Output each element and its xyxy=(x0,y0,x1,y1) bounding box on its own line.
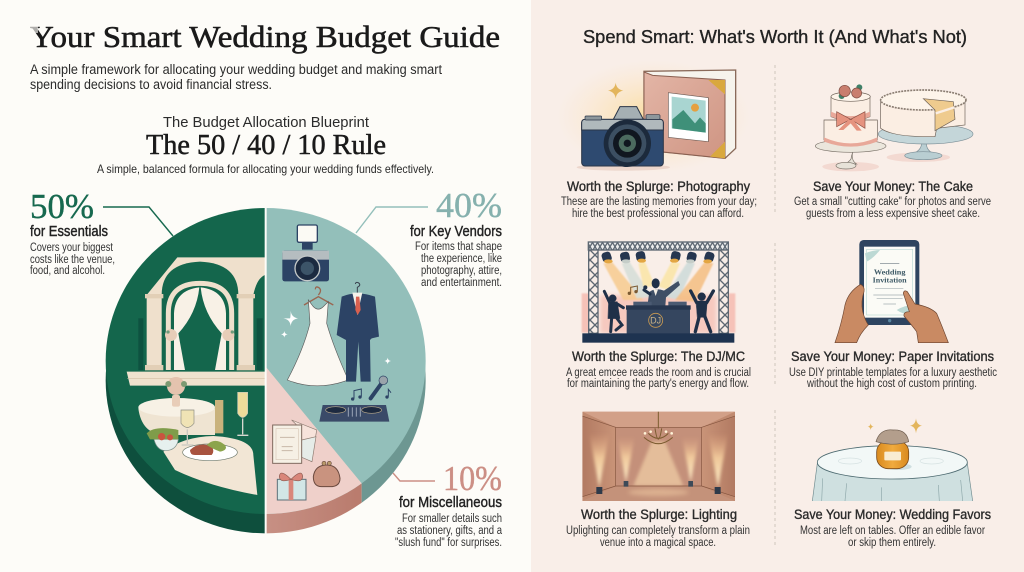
section heading: The 50 / 40 / 10 Rule xyxy=(146,130,386,161)
title: Your Smart Wedding Budget Guide xyxy=(30,19,500,54)
icon: stationery xyxy=(273,420,317,463)
card: cake xyxy=(794,84,991,220)
callout: 50% essentials: costs like the venue, xyxy=(30,254,115,266)
icon: tablet with digital invitation xyxy=(835,240,948,343)
card text xyxy=(561,196,757,220)
callout: 10% miscellaneous: for Miscellaneous xyxy=(399,495,502,511)
icon: microphone and music notes xyxy=(351,376,391,401)
card text xyxy=(566,367,751,390)
callout: 40% key vendors: the experience, like xyxy=(421,253,502,265)
panel: left background xyxy=(0,0,531,572)
callout: 50% essentials: food, and alcohol. xyxy=(30,265,105,277)
intro text: spending decisions to avoid financial stress. xyxy=(30,77,272,92)
card text xyxy=(794,196,991,220)
callout: 50% essentials: Covers your biggest xyxy=(30,242,114,254)
heading: spend smart: Spend Smart: What's Worth It (And What's Not) xyxy=(583,27,967,47)
callout: 40% key vendors xyxy=(356,186,502,289)
section description: A simple, balanced formula for allocating your wedding funds effectively. xyxy=(97,162,434,176)
section subtitle: The Budget Allocation Blueprint xyxy=(163,114,370,131)
venue arches xyxy=(127,257,265,386)
card heading: Save Your Money: The Cake xyxy=(813,179,973,194)
card heading: Save Your Money: Wedding Favors xyxy=(794,507,991,522)
callout: 40% key vendors: For items that shape xyxy=(415,241,502,253)
pie chart: 50/40/10 allocation xyxy=(100,200,433,537)
card text xyxy=(800,525,985,549)
pie slice: 50% essentials xyxy=(100,200,433,520)
callout: 50% essentials: 50% xyxy=(30,187,94,226)
callout: 40% key vendors: for Key Vendors xyxy=(410,224,502,240)
callout: 10% miscellaneous: as stationery, gifts, and a xyxy=(397,525,502,537)
card text: hire the best professional you can afford. xyxy=(572,208,744,220)
callout: 10% miscellaneous: For smaller details such xyxy=(402,513,502,525)
card: DJ xyxy=(566,242,751,390)
callout: 10% miscellaneous: 10% xyxy=(443,459,502,498)
icon: DJ on stage: DJ xyxy=(650,316,661,326)
intro text xyxy=(30,62,442,92)
card heading: Worth the Splurge: Lighting xyxy=(581,507,737,522)
callout: 40% key vendors: photography, attire, xyxy=(421,265,502,277)
pie extrusion edge xyxy=(106,370,426,534)
card: lighting xyxy=(566,412,750,549)
callout: 40% key vendors: 40% xyxy=(436,186,502,225)
icon: coin purse xyxy=(313,461,340,487)
intro text: A simple framework for allocating your wedding budget and making smart xyxy=(30,62,442,77)
icon: DJ deck xyxy=(319,405,389,422)
card text: Most are left on tables. Offer an edible favor xyxy=(800,525,985,537)
pie slice: 10% miscellaneous xyxy=(266,368,362,514)
card text: or skip them entirely. xyxy=(848,537,936,549)
card text: guests from a less expensive sheet cake. xyxy=(806,208,980,220)
icon: camera and flash xyxy=(282,225,329,281)
callout: 40% key vendors: and entertainment. xyxy=(421,277,502,289)
icon: navy suit xyxy=(337,282,391,382)
card text: Uplighting can completely transform a plain xyxy=(566,525,750,537)
callout: 10% miscellaneous xyxy=(393,459,502,549)
pie slice: 40% key vendors xyxy=(266,200,433,520)
icon: honey jar on round table xyxy=(812,418,973,501)
card text: A great emcee reads the room and is crucial xyxy=(566,367,751,379)
callout: 10% miscellaneous: "slush fund" for surprises. xyxy=(395,537,502,549)
card heading: Save Your Money: Paper Invitations xyxy=(791,349,994,364)
card heading: Worth the Splurge: Photography xyxy=(567,179,750,194)
icon: gift box xyxy=(277,473,306,500)
icon: tiered cake and sheet cake xyxy=(815,84,973,171)
callout: 50% essentials: for Essentials xyxy=(30,224,108,240)
icon: DJ on stage xyxy=(582,242,735,343)
card: photography xyxy=(557,60,757,220)
icon: tablet with digital invitation: Wedding xyxy=(874,267,906,276)
card text: without the high cost of custom printing. xyxy=(806,378,977,390)
card text xyxy=(789,367,997,390)
callout: 50% essentials xyxy=(30,187,173,277)
card text: These are the lasting memories from your day; xyxy=(561,196,757,208)
card text: venue into a magical space. xyxy=(600,537,716,549)
card text: for maintaining the party's energy and flow. xyxy=(567,378,749,390)
icon: wedding dress xyxy=(281,287,348,386)
icon: tablet with digital invitation: Invitation xyxy=(873,276,907,285)
card: favors xyxy=(794,418,991,549)
icon: camera and photo album xyxy=(557,60,750,173)
card: invitations xyxy=(789,240,997,390)
card text xyxy=(566,525,750,549)
dining tables and food xyxy=(138,377,257,495)
card heading: Worth the Splurge: The DJ/MC xyxy=(572,349,745,364)
panel: right background xyxy=(531,0,1024,572)
icon: uplit room with chandelier xyxy=(582,412,735,501)
